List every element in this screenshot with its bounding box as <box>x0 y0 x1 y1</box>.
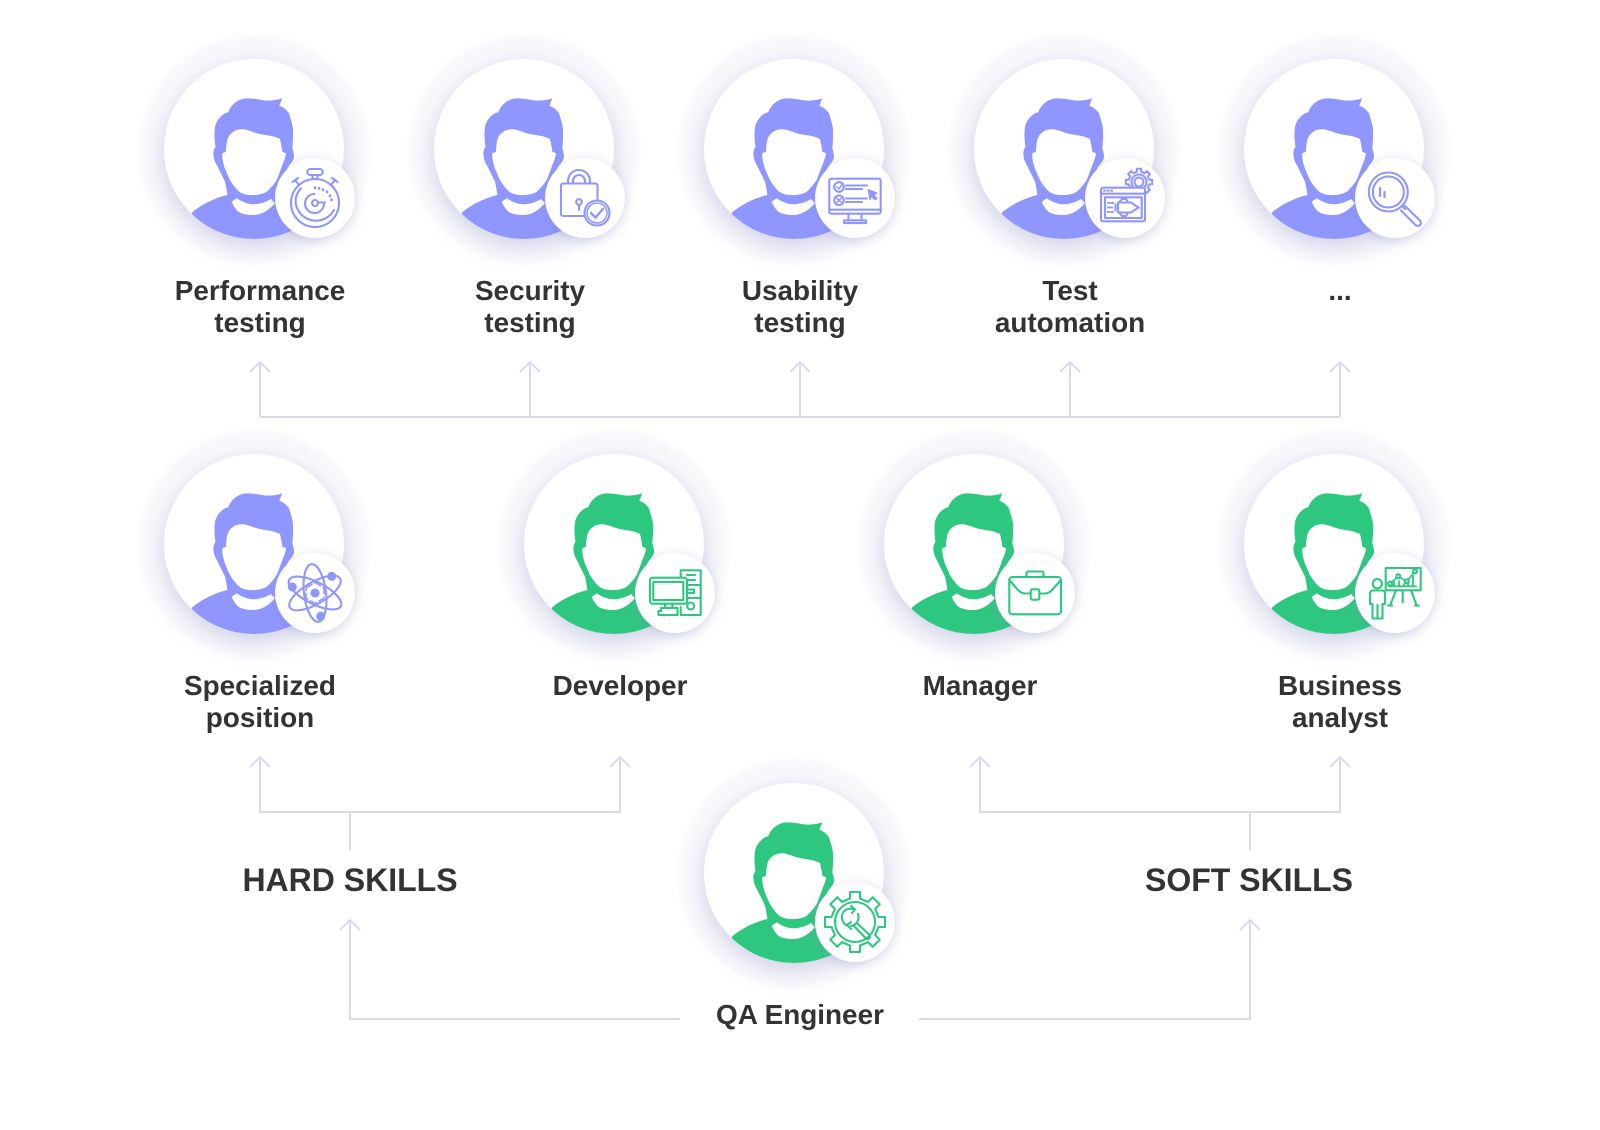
label: specialized position: Specialized <box>184 670 336 701</box>
label: usability testing: testing <box>754 307 846 338</box>
label: manager: Manager <box>923 670 1037 701</box>
card: specialized position avatar <box>140 430 368 658</box>
icon: monitor with checklist <box>829 179 881 223</box>
label: performance testing: testing <box>214 307 306 338</box>
label: ellipsis: ... <box>1328 275 1352 306</box>
card: manager avatar <box>860 430 1088 658</box>
label: business analyst: Business <box>1278 670 1402 701</box>
heading: hard skills: HARD SKILLS <box>242 862 458 898</box>
label: security testing: Security <box>475 275 585 306</box>
label: QA engineer: QA Engineer <box>716 999 884 1030</box>
icon: rocket window with gear <box>1101 169 1152 221</box>
icon: stopwatch <box>291 169 339 227</box>
icon: presenter with chart <box>1370 568 1421 618</box>
label: test automation: automation <box>995 307 1145 338</box>
card: security testing avatar <box>410 34 638 264</box>
label: specialized position: position <box>206 702 314 733</box>
card: performance testing avatar <box>140 34 368 264</box>
heading: soft skills: SOFT SKILLS <box>1145 862 1353 898</box>
label: test automation: Test <box>1042 275 1098 306</box>
connector: QA Engineer to soft skills <box>919 920 1260 1019</box>
label: performance testing: Performance <box>175 275 345 306</box>
label: business analyst: analyst <box>1292 702 1388 733</box>
icon: atom <box>284 563 346 623</box>
card: test automation avatar <box>950 34 1178 264</box>
connector: QA Engineer to hard skills <box>340 920 680 1019</box>
label: developer: Developer <box>553 670 688 701</box>
icon: magnifying glass <box>1369 172 1421 226</box>
icon: gear with wrench <box>825 892 885 952</box>
label: usability testing: Usability <box>742 275 858 306</box>
connector: top row arrows <box>250 362 1350 417</box>
icon: padlock with check <box>561 170 610 226</box>
card: more specialisations avatar <box>1220 34 1448 264</box>
connector: hard skills arrows <box>250 757 630 850</box>
card: QA engineer avatar <box>680 758 908 988</box>
card: developer avatar <box>500 430 728 658</box>
card: business analyst avatar <box>1220 430 1448 658</box>
icon: desktop computer <box>650 570 701 615</box>
connector: soft skills arrows <box>970 757 1350 850</box>
card: usability testing avatar <box>680 34 908 264</box>
label: security testing: testing <box>484 307 576 338</box>
icon: briefcase <box>1009 572 1061 614</box>
